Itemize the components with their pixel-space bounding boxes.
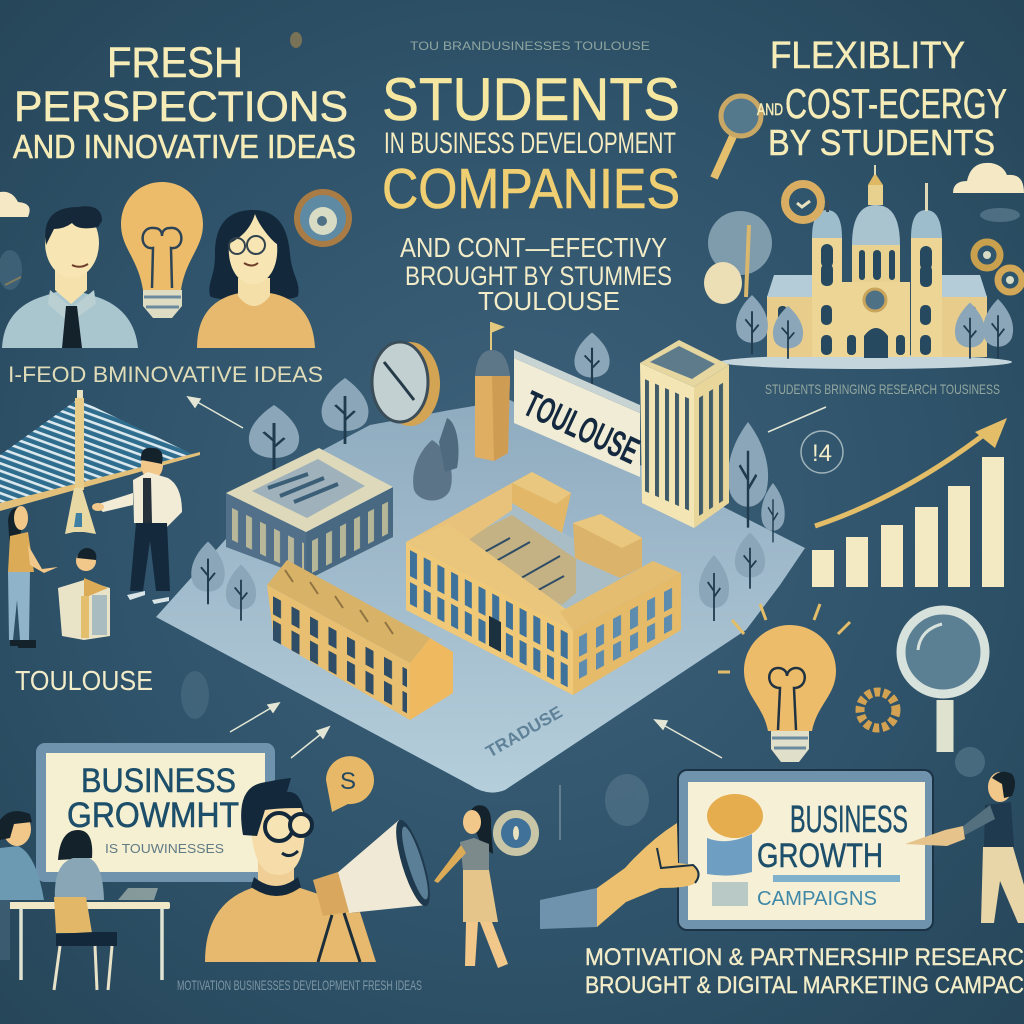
- heading: flexibility: BY STUDENTS: [768, 122, 995, 163]
- main title: TOULOUSE: [478, 286, 620, 316]
- panel: business growth left: IS TOUWINESSES: [105, 841, 224, 856]
- main title: AND CONT—EFECTIVY: [400, 232, 667, 263]
- icon: gear target: [294, 189, 352, 247]
- illustration: brick building front: [267, 560, 453, 720]
- illustration: woman with glasses: [197, 210, 315, 348]
- caption: faint text line: MOTIVATION BUSINESSES DEVELOPMENT FRESH IDEAS: [177, 977, 422, 993]
- heading: fresh perspectives: FRESH: [107, 39, 243, 87]
- icon: small cloud left: [0, 192, 30, 217]
- illustration: tall building: [640, 340, 729, 528]
- illustration: tower with flag: [475, 322, 510, 461]
- illustration: man with tie: [2, 206, 138, 348]
- illustration: man pointing at screen: [905, 772, 1024, 923]
- main title: COMPANIES: [382, 157, 680, 221]
- panel: business growth left: GROWMHT: [67, 796, 239, 835]
- illustration: hand pointing: [540, 823, 699, 929]
- icon: large bulb right: [718, 604, 850, 762]
- panel: business growth right: GROWTH: [757, 837, 883, 875]
- icon: cloud right: [953, 163, 1024, 193]
- trees behind campus: [191, 332, 785, 621]
- icon: gear mid: [497, 814, 535, 852]
- arrows: small white: [188, 397, 826, 758]
- heading: flexibility: [757, 35, 1007, 163]
- heading: fresh perspectives: [13, 39, 356, 165]
- decorative sketches: [0, 32, 1020, 840]
- illustration: bridge: [0, 390, 200, 534]
- icon: magnifying glass bottom: [901, 610, 985, 752]
- illustration: central courtyard building: [406, 472, 681, 695]
- chart: growth bars: !4: [812, 440, 832, 467]
- heading: fresh perspectives: AND INNOVATIVE IDEAS: [13, 128, 356, 165]
- illustration: man at lectern: [58, 548, 110, 640]
- illustration: woman talking: [8, 506, 58, 648]
- panel: business growth left: [36, 743, 275, 882]
- illustration: clock: [372, 342, 440, 426]
- main title: IN BUSINESS DEVELOPMENT: [384, 127, 676, 160]
- main title: TOU BRANDUSINESSES TOULOUSE: [410, 39, 650, 53]
- illustration: presenter with tie: [92, 448, 182, 604]
- illustration: man with megaphone: S: [340, 768, 356, 795]
- main title: BROUGHT BY STUMMES: [405, 261, 672, 291]
- icon: large light bulb: [121, 182, 203, 318]
- illustration: blue office building: [226, 448, 393, 577]
- panel: business growth right: [678, 770, 933, 930]
- main title: STUDENTS: [382, 66, 680, 133]
- icon: magnifier top: [714, 96, 761, 178]
- isometric campus ground: [156, 400, 805, 793]
- heading: flexibility: FLEXIBLITY: [770, 35, 965, 77]
- panel: business growth right: BUSINESS: [790, 799, 908, 841]
- heading: fresh perspectives: PERSPECTIONS: [14, 83, 348, 131]
- panel: business growth right: CAMPAIGNS: [757, 888, 877, 910]
- ground label: TRADUSE: [482, 703, 566, 761]
- icon: gears right: [785, 184, 1022, 292]
- sign: toulouse: TOULOUSE: [518, 383, 646, 472]
- illustration: people at desk: [0, 811, 170, 990]
- main title: [382, 39, 680, 316]
- illustration: walking woman: [434, 805, 508, 968]
- illustration: man with megaphone: [205, 756, 437, 962]
- caption: toulouse left: TOULOUSE: [15, 665, 153, 696]
- sign: toulouse: [514, 350, 646, 477]
- illustration: cathedral: [704, 165, 1013, 369]
- panel: business growth left: BUSINESS: [81, 762, 236, 800]
- heading: flexibility: AND: [757, 100, 783, 119]
- chart: growth bars: [801, 418, 1007, 587]
- icon: gear orange: [860, 692, 896, 728]
- caption: innovative ideas: I-FEOD BMINOVATIVE IDEAS: [8, 362, 323, 387]
- caption: motivation and partnership: [585, 944, 1024, 999]
